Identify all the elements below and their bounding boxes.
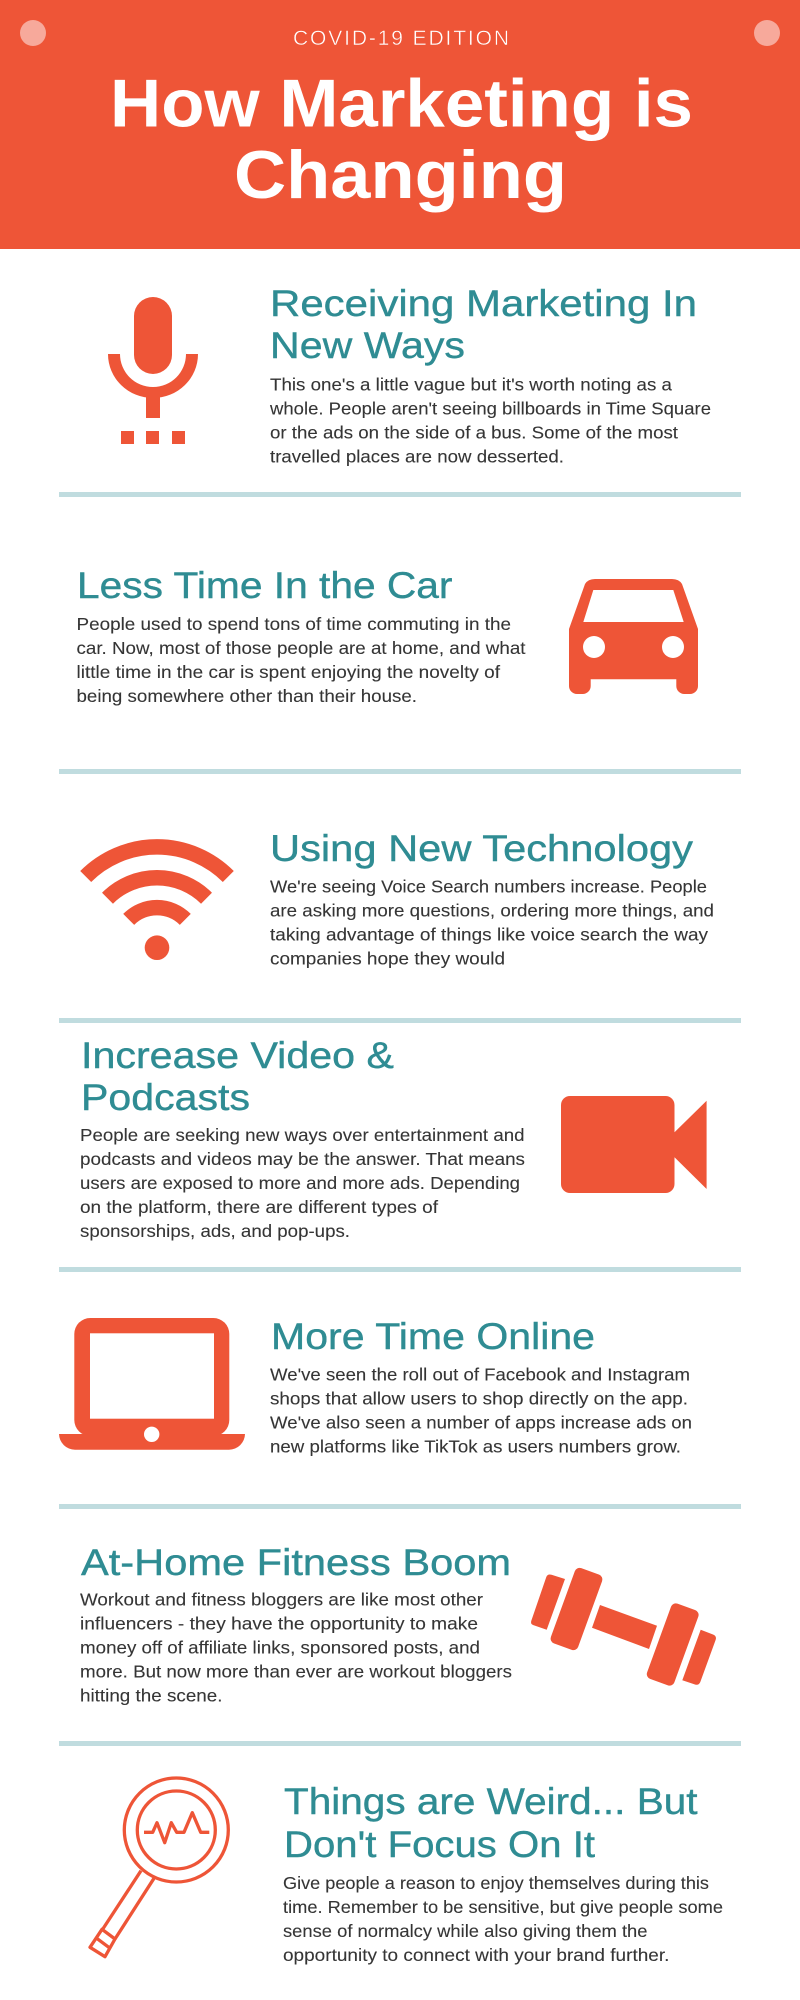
decorative dot left bbox=[20, 20, 46, 46]
body text: little time in the car is spent enjoying the novelty of bbox=[76, 662, 500, 682]
body text: We've also seen a number of apps increase ads on bbox=[270, 1413, 692, 1433]
header banner bbox=[0, 0, 800, 249]
body text bbox=[80, 1125, 525, 1241]
body text: are asking more questions, ordering more things, and bbox=[270, 901, 714, 921]
panel: receiving marketing in new ways bbox=[108, 283, 711, 467]
body text: We're seeing Voice Search numbers increase. People bbox=[270, 877, 707, 897]
body text: sense of normalcy while also giving them the bbox=[283, 1921, 648, 1941]
heading bbox=[81, 1035, 394, 1118]
heading: Things are Weird... But bbox=[284, 1781, 698, 1822]
body text bbox=[80, 1590, 512, 1706]
heading: New Ways bbox=[270, 325, 465, 366]
title: Changing bbox=[234, 137, 567, 213]
body text: more. But now more than ever are workout bloggers bbox=[80, 1662, 512, 1682]
heading bbox=[270, 283, 697, 366]
body text bbox=[270, 877, 714, 969]
body text: podcasts and videos may be the answer. That means bbox=[80, 1149, 525, 1169]
body text: car. Now, most of those people are at home, and what bbox=[76, 638, 526, 658]
body text: taking advantage of things like voice search the way bbox=[270, 925, 708, 945]
body text: being somewhere other than their house. bbox=[76, 686, 417, 706]
body text: Workout and fitness bloggers are like most other bbox=[80, 1590, 483, 1610]
decorative dot right bbox=[754, 20, 780, 46]
panel: things are weird bbox=[90, 1778, 723, 1965]
body text: travelled places are now desserted. bbox=[270, 447, 564, 467]
heading bbox=[284, 1781, 698, 1865]
heading: More Time Online bbox=[271, 1316, 595, 1357]
icon: laptop bbox=[59, 1318, 245, 1450]
body text: or the ads on the side of a bus. Some of the most bbox=[270, 423, 678, 443]
body text: We've seen the roll out of Facebook and Instagram bbox=[270, 1365, 690, 1385]
panel: more time online bbox=[59, 1316, 692, 1457]
icon: car bbox=[569, 579, 698, 694]
body text: influencers - they have the opportunity to make bbox=[80, 1614, 478, 1634]
panel: less time in the car bbox=[76, 565, 698, 706]
body text: time. Remember to be sensitive, but give people some bbox=[283, 1897, 723, 1917]
body text: on the platform, there are different types of bbox=[80, 1197, 438, 1217]
body text: Give people a reason to enjoy themselves during this bbox=[283, 1873, 709, 1893]
body text bbox=[283, 1873, 723, 1965]
icon: microphone bbox=[108, 297, 198, 444]
panel: at-home fitness boom bbox=[80, 1542, 716, 1706]
body text: hitting the scene. bbox=[80, 1686, 222, 1706]
icon: dumbbell bbox=[531, 1566, 716, 1687]
body text: money off of affiliate links, sponsored posts, and bbox=[80, 1638, 480, 1658]
icon: magnifying glass with pulse bbox=[90, 1778, 228, 1957]
body text: sponsorships, ads, and pop-ups. bbox=[80, 1221, 350, 1241]
icon: wifi bbox=[86, 847, 228, 960]
panel: increase video and podcasts bbox=[80, 1035, 707, 1241]
body text: opportunity to connect with your brand further. bbox=[283, 1945, 669, 1965]
body text: new platforms like TikTok as users numbers grow. bbox=[270, 1437, 681, 1457]
heading: Less Time In the Car bbox=[77, 565, 452, 606]
body text bbox=[269, 375, 711, 467]
body text: People are seeking new ways over entertainment and bbox=[80, 1125, 524, 1145]
heading: Podcasts bbox=[81, 1077, 250, 1118]
title: How Marketing is bbox=[110, 66, 693, 142]
panel: using new technology bbox=[86, 828, 714, 969]
icon: video camera bbox=[561, 1096, 707, 1193]
heading: Receiving Marketing In bbox=[270, 283, 697, 324]
body text bbox=[270, 1365, 692, 1457]
body text: People used to spend tons of time commuting in the bbox=[76, 614, 511, 634]
body text: shops that allow users to shop directly on the app. bbox=[270, 1389, 688, 1409]
subtitle: COVID-19 EDITION bbox=[293, 27, 509, 50]
heading: Don't Focus On It bbox=[284, 1824, 596, 1865]
body text: companies hope they would bbox=[270, 949, 505, 969]
title bbox=[110, 66, 693, 213]
heading: At-Home Fitness Boom bbox=[81, 1542, 511, 1583]
body text: This one's a little vague but it's worth noting as a bbox=[270, 375, 672, 395]
body text: whole. People aren't seeing billboards in Time Square bbox=[269, 399, 711, 419]
body text bbox=[76, 614, 526, 706]
body text: users are exposed to more and more ads. Depending bbox=[80, 1173, 520, 1193]
heading: Increase Video & bbox=[81, 1035, 394, 1076]
heading: Using New Technology bbox=[270, 828, 694, 869]
